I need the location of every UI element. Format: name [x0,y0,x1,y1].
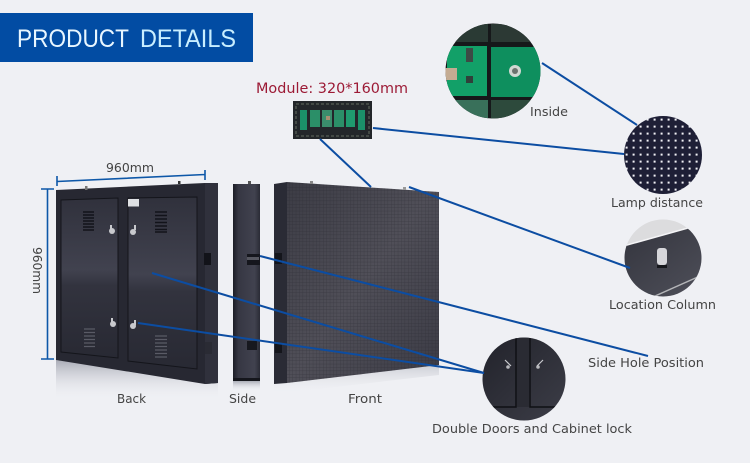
circle: double doors and lock [480,337,570,420]
leader: module to cabinet [320,139,371,187]
leader: inside to lamp [542,63,637,125]
front face [287,182,439,383]
leader lines [138,63,648,373]
reflection under back cabinet [56,360,218,400]
vents [83,212,94,230]
back cabinet side edge [205,183,218,384]
locks [109,225,136,329]
front LED mesh [287,182,439,383]
front side edge [274,182,287,384]
side lower hole [247,341,257,350]
title banner [0,13,253,62]
side handle [247,254,260,265]
pegs [85,186,88,190]
front side holes [275,253,282,264]
circle: location column [624,220,702,296]
right door [128,197,197,369]
label: lamp distance: Lamp distance [611,196,703,210]
cabinet: front view [274,181,439,394]
leader: side hole [260,256,648,356]
label: back: Back [117,392,146,406]
label plate [128,199,139,206]
side holes [204,253,211,265]
cabinet: side view [233,181,260,391]
back cabinet body [56,183,218,384]
cabinet: back view [56,181,218,400]
circle: lamp distance [624,116,702,194]
title banner: DETAILS [140,25,236,53]
left door [61,198,118,358]
leader: module to lamp [373,128,624,154]
leader: location column [409,187,630,268]
label: double doors: Double Doors and Cabinet lock [432,422,632,436]
label: location column: Location Column [609,298,716,312]
dimension: width 960mm: 960mm [106,160,154,175]
leader: lock [138,323,484,373]
side peg [248,181,251,184]
dimension: width 960mm [57,160,205,186]
label: side hole position: Side Hole Position [588,356,704,370]
label: front: Front [348,392,382,406]
reflection under front cabinet [274,365,439,394]
front pegs [310,181,313,184]
leader: door [152,273,484,373]
title banner: PRODUCT [17,25,129,53]
module photo [293,101,372,139]
side body [233,184,260,381]
dimension: height 960mm: 960mm [30,247,45,294]
label: side: Side [229,392,256,406]
reflection under side cabinet [233,381,260,391]
dimension: height 960mm [30,189,54,359]
module label: Module: 320*160mm [256,81,408,97]
circle: inside detail [445,24,543,120]
label: inside: Inside [530,105,568,119]
